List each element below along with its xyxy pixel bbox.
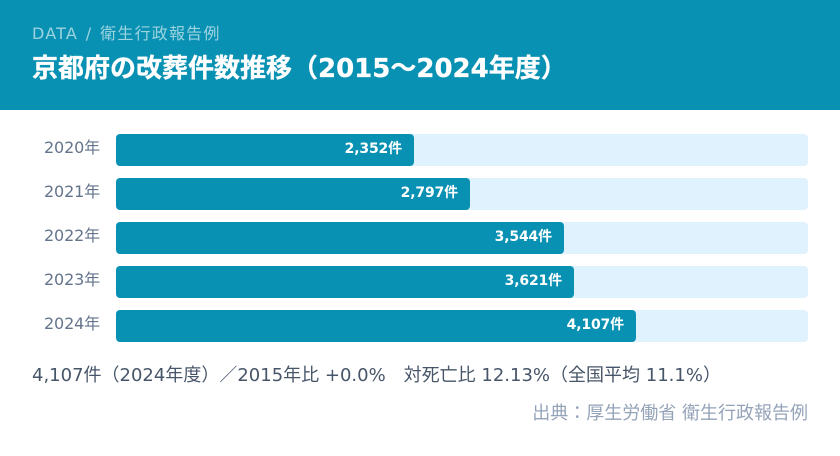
year label 2023: 2023年	[44, 270, 100, 289]
header banner	[0, 0, 840, 110]
bar row 2021: 2,797件	[401, 185, 458, 201]
year label 2020: 2020年	[44, 138, 100, 157]
year label 2021: 2021年	[44, 182, 100, 201]
bar row 2023	[116, 266, 808, 298]
title: 京都府の改葬件数推移（2015～2024年度）	[32, 54, 567, 84]
bar row 2020	[116, 134, 808, 166]
year label 2024: 2024年	[44, 314, 100, 333]
bar row 2023: 3,621件	[505, 273, 562, 289]
year label 2022: 2022年	[44, 226, 100, 245]
bar row 2024	[116, 310, 808, 342]
bar row 2022	[116, 222, 808, 254]
bar row 2024: 4,107件	[567, 317, 624, 333]
bar chart	[32, 134, 808, 342]
bar row 2020: 2,352件	[345, 141, 402, 157]
source note: 出典：厚生労働省 衛生行政報告例	[532, 403, 808, 424]
summary text: 4,107件（2024年度）／2015年比 +0.0% 対死亡比 12.13%（全国平均 11.1%）	[32, 365, 721, 386]
bar row 2021	[116, 178, 808, 210]
breadcrumb label: DATA / 衛生行政報告例	[32, 24, 221, 43]
bar row 2022: 3,544件	[495, 229, 552, 245]
